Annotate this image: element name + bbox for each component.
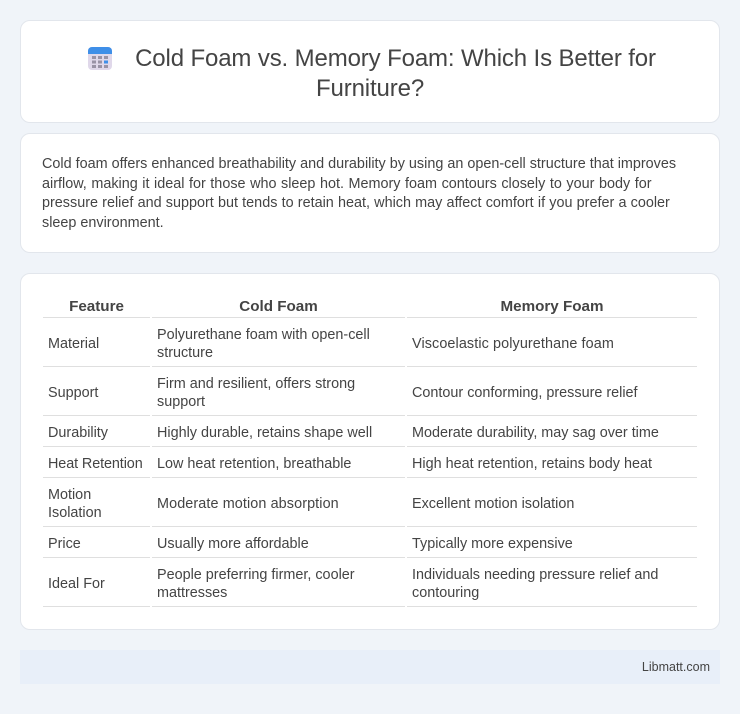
table header [69,298,603,315]
row: durability: Durability [48,425,108,441]
title: Furniture? [316,75,424,102]
table header: Cold Foam [239,298,318,315]
text block: introduction [42,156,676,231]
row: motion isolation: Isolation [48,505,102,521]
row: durability: Moderate durability, may sag over time [412,425,659,441]
row: material: Polyurethane foam with open-cell [157,327,370,343]
row: support: Firm and resilient, offers strong [157,376,355,392]
row: material: Viscoelastic polyurethane foam [412,336,614,352]
row: motion isolation: Excellent motion isolation [412,496,574,512]
text block: introduction: pressure relief and support but tends to retain heat, which may affect comfort if you prefer a cooler [42,195,670,211]
row: ideal for: mattresses [157,585,227,601]
table header: Memory Foam [501,298,603,315]
title: Cold Foam vs. Memory Foam: Which Is Better for [135,45,656,72]
text block: introduction: sleep environment. [42,215,164,231]
row: motion isolation: Moderate motion absorption [157,496,339,512]
row: ideal for: contouring [412,585,479,601]
row: heat retention: Heat Retention [48,456,143,472]
row: ideal for [48,567,658,601]
table header: Feature [69,298,124,315]
row: support: Contour conforming, pressure relief [412,385,638,401]
footer bar [20,650,720,684]
icon: calendar [88,47,112,70]
panel: introduction [20,133,720,253]
row: material [48,327,614,361]
row: support [48,376,638,410]
row: ideal for: Ideal For [48,576,105,592]
row: motion isolation: Motion [48,487,91,503]
row: support: support [157,394,205,410]
row: material: structure [157,345,213,361]
row: price: Usually more affordable [157,536,309,552]
row: durability [48,425,659,441]
footer text: Libmatt.com [642,660,710,674]
row: support: Support [48,385,98,401]
row: material: Material [48,336,99,352]
panel: header [20,20,720,123]
row: heat retention: Low heat retention, breathable [157,456,351,472]
row: durability: Highly durable, retains shape well [157,425,372,441]
text block: introduction: airflow, making it ideal for those who sleep hot. Memory foam contours closely to your body for [42,176,652,192]
row: ideal for: People preferring firmer, cooler [157,567,355,583]
row: price [48,536,573,552]
row: heat retention [48,456,652,472]
row: heat retention: High heat retention, retains body heat [412,456,652,472]
row: ideal for: Individuals needing pressure relief and [412,567,658,583]
title [135,45,656,102]
text block: introduction: Cold foam offers enhanced breathability and durability by using an open-cell structure that improves [42,156,676,172]
row: price: Price [48,536,81,552]
panel: comparison table [20,273,720,630]
row: motion isolation [48,487,574,521]
row: price: Typically more expensive [412,536,573,552]
